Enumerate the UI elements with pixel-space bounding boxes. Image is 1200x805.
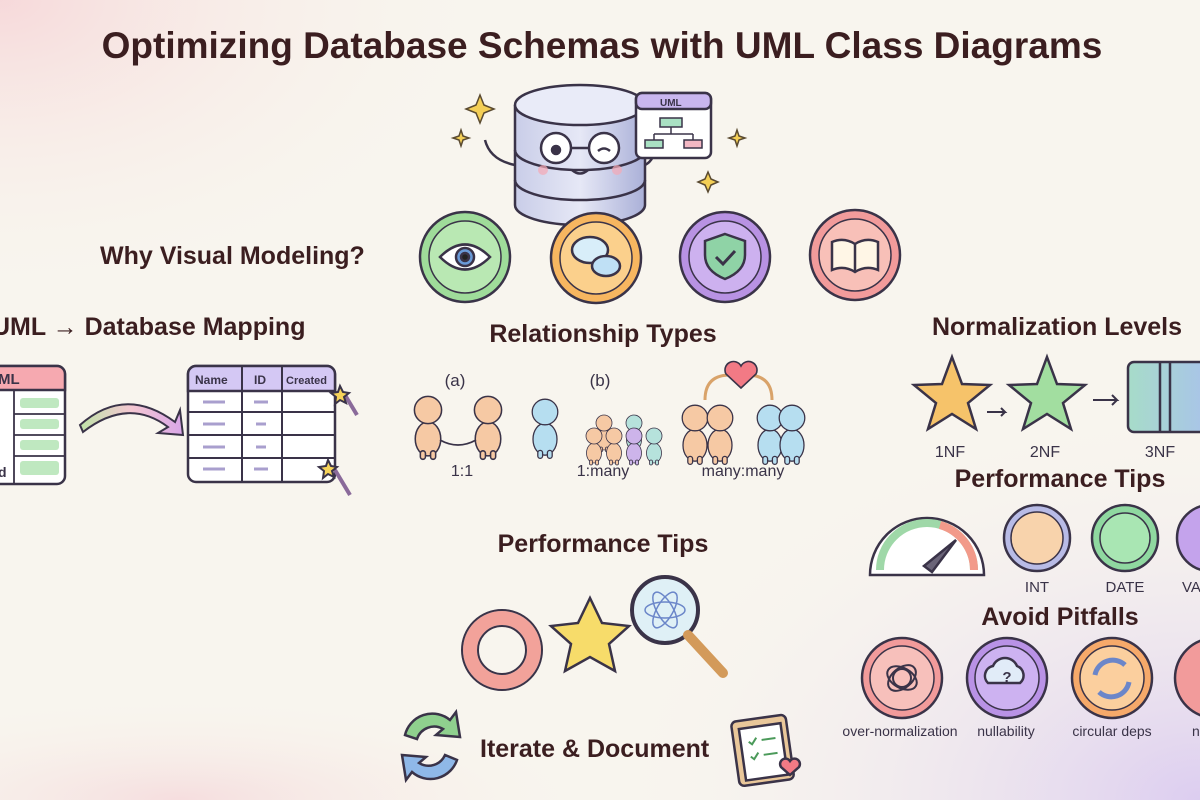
text: circular deps	[1072, 723, 1152, 739]
database table: ID	[254, 373, 266, 387]
text: n	[1192, 723, 1200, 739]
text: 1:many	[577, 463, 629, 480]
figures: 1:many	[532, 399, 662, 465]
heading: normalization levels: Normalization Levels	[932, 313, 1182, 341]
badges: why visual modeling	[420, 210, 900, 303]
heading: uml to database mapping: UML → Database Mapping	[0, 313, 305, 341]
heading: relationship types: Relationship Types	[489, 320, 717, 348]
title: Optimizing Database Schemas with UML Class Diagrams	[102, 25, 1102, 66]
text: UML	[660, 98, 682, 109]
database table: Name	[195, 373, 228, 387]
heading: iterate & document: Iterate & Document	[480, 735, 710, 763]
icon: clipboard	[731, 714, 800, 786]
text: over-normalization	[842, 723, 958, 739]
text: 2NF	[1030, 444, 1060, 461]
icons: performance tips center	[462, 577, 723, 690]
text: ?	[1002, 669, 1012, 686]
heading: performance tips (center): Performance Tips	[498, 530, 708, 558]
uml class card	[0, 366, 65, 484]
text: DATE	[1106, 579, 1144, 596]
text: 1:1	[451, 463, 473, 480]
arrow: uml to table	[80, 404, 183, 435]
text: 3NF	[1145, 444, 1175, 461]
heading: performance tips (right): Performance Tips	[955, 465, 1165, 493]
heading: why visual modeling: Why Visual Modeling?	[100, 242, 365, 270]
text: many:many	[702, 463, 784, 480]
heading: avoid pitfalls: Avoid Pitfalls	[981, 603, 1139, 631]
text: INT	[1025, 579, 1049, 596]
normalization icons	[914, 357, 1200, 432]
icon: iterate cycle	[402, 712, 460, 780]
text: (b)	[590, 371, 610, 390]
relationship labels: (a)	[445, 371, 465, 390]
figures: many:many	[682, 361, 805, 464]
database table	[188, 366, 335, 482]
figures: 1:1	[414, 396, 502, 459]
gauge and type badges	[870, 505, 1200, 575]
icon: sparkles	[453, 95, 745, 192]
text: 1NF	[935, 444, 965, 461]
text: nullability	[977, 723, 1035, 739]
mascot: database with UML card	[485, 85, 711, 225]
database table: Created	[286, 375, 327, 387]
icon: magic wands	[319, 386, 357, 495]
pitfall badges	[862, 638, 1200, 718]
